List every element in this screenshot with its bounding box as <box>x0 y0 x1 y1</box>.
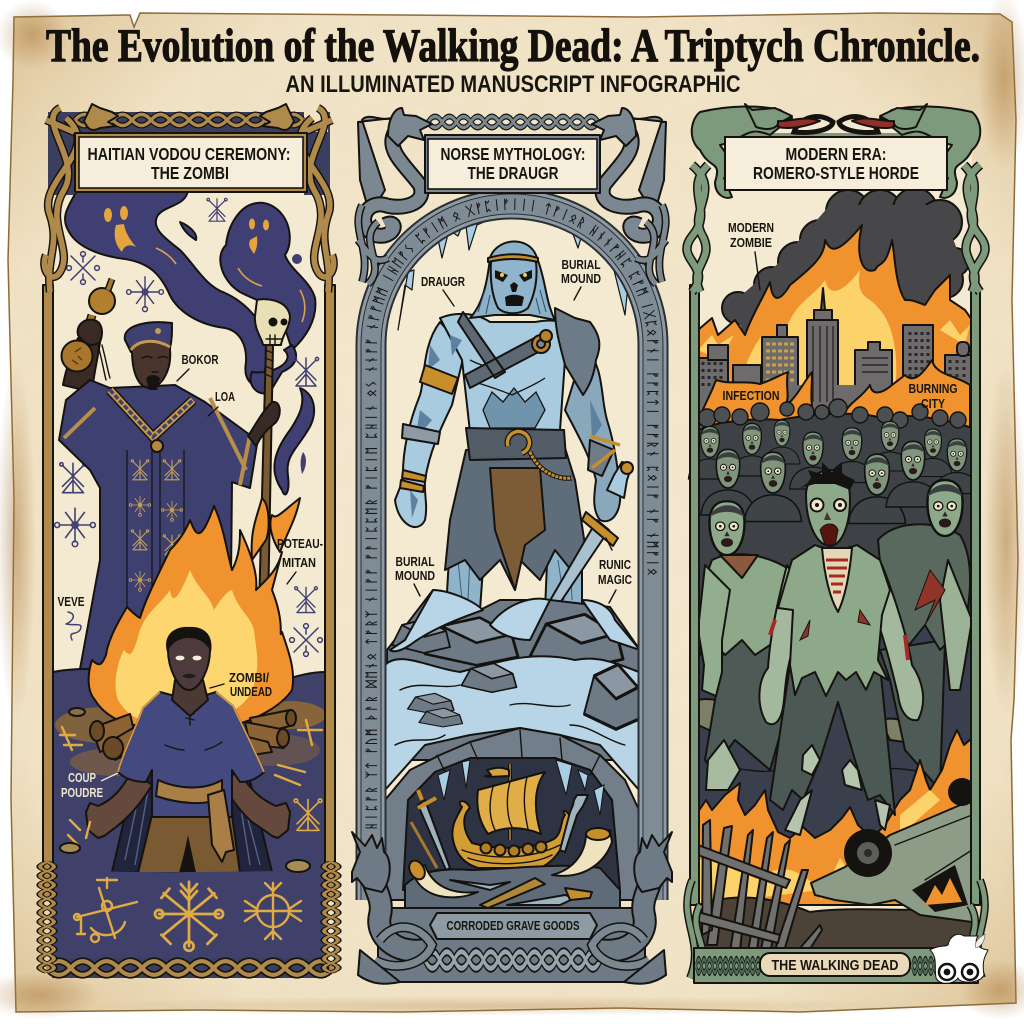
right hand <box>248 402 280 446</box>
burning ground <box>698 897 972 950</box>
zombie: left <box>698 501 790 790</box>
swords and horns <box>406 790 612 908</box>
label: corroded grave goods: CORRODED GRAVE GOODS <box>446 918 580 933</box>
broken fence <box>698 820 808 958</box>
bokor priest <box>59 279 290 680</box>
zombi rising from the grave <box>86 627 290 873</box>
shirt <box>778 545 890 696</box>
sash <box>156 780 222 803</box>
rune inscription: ᚺᛁᛈᚠᚱ ᛉᛏ ᚠᚢᛗ ᚦᚨᚱ ᛞᛖᚾᛟ ᛏᚠᚱᛉ ᚾᛁᚠᚠ ᚠᚨᛁᛈᛈᛖᚱ ᚠᛁᛈᛁᛖ ᛈᚺᛁᚾ ᛟᛊ ᚾᚾᚠᚠ ᚾᚠᚠᛗᛗ ᛁᚺᛖᚠᛊ ᛈᚠᛁᛗ ᛟ ᚷᚠᛈᛁᚠᛁᛁᛁ ᛏᚠᛁᛟᚱ ᚺᚾᚾᚠᚺᛈ ᛈᚠᛗ ᛁᚷᛈᛟᚠᚾᛁ ᚠᚠᛈᛏᛁ ᚠᚠᚱᚾ ᛈᛟᛁᚠ ᚾᚠ ᚾᛗᚠᛁᛟ <box>365 198 659 828</box>
sword <box>527 462 633 640</box>
bottom braid <box>52 958 326 978</box>
left arm <box>395 322 465 527</box>
heading box: THE DRAUGR <box>468 163 559 183</box>
callouts: MITAN <box>282 556 316 570</box>
panel interior <box>697 125 972 975</box>
bonfire <box>89 498 300 725</box>
tattered trousers <box>770 665 895 815</box>
callouts: INFECTION <box>722 389 780 403</box>
burning city <box>698 288 972 445</box>
icicles <box>398 216 632 330</box>
loincloth <box>490 468 545 590</box>
silhouette crowd <box>698 399 966 428</box>
heading box: HAITIAN VODOU CEREMONY: <box>88 144 290 164</box>
skull face <box>491 257 537 313</box>
ornament: upper dragons and knotwork <box>358 108 666 284</box>
callouts: LOA <box>215 390 235 404</box>
earth patches <box>55 701 326 776</box>
callouts: POUDRE <box>61 786 103 800</box>
pants <box>138 815 240 873</box>
callouts: MAGIC <box>598 573 632 587</box>
frame <box>40 104 338 978</box>
gold arm bands <box>420 365 458 394</box>
cave icicles <box>438 760 604 815</box>
horde <box>688 399 980 760</box>
knotted vines <box>687 165 985 292</box>
head <box>800 462 855 546</box>
raised arm <box>63 338 100 392</box>
skirt <box>445 448 585 590</box>
arms <box>86 770 290 838</box>
callouts: BURIAL <box>562 258 601 272</box>
grave pit <box>112 760 272 872</box>
gourd rattle <box>62 279 115 380</box>
draugr <box>395 241 633 640</box>
left dragon <box>358 108 432 284</box>
callouts: BURNING <box>908 382 958 396</box>
belt <box>466 428 566 460</box>
horde backdrop <box>698 414 972 760</box>
legs <box>446 540 582 610</box>
callouts: DRAUGR <box>421 275 465 289</box>
arms <box>759 565 808 724</box>
label: corroded grave goods <box>430 913 597 939</box>
foreground flames <box>698 730 972 905</box>
callouts: BOKOR <box>182 353 218 367</box>
callouts: ZOMBIE <box>730 236 772 250</box>
robe trim <box>64 390 250 670</box>
chest wounds <box>468 360 545 428</box>
vodou sigils <box>55 198 322 656</box>
spirit smoke <box>65 190 315 494</box>
cross strap <box>458 312 548 388</box>
hair <box>470 241 555 320</box>
heading box <box>725 137 947 190</box>
callouts: MODERN <box>728 221 774 235</box>
central knot <box>428 116 598 128</box>
city windows <box>703 326 964 402</box>
neck and head <box>172 680 208 716</box>
burial mound rocks <box>385 590 642 790</box>
zombie: central leader <box>759 462 923 835</box>
callouts <box>395 258 632 603</box>
icon: owl logo <box>930 934 988 983</box>
hand on rattle <box>78 320 102 345</box>
callouts <box>722 221 958 411</box>
callouts: MOUND <box>395 569 435 583</box>
callouts: CITY <box>921 397 946 411</box>
heading box <box>425 135 600 193</box>
debris <box>800 925 822 952</box>
heading box <box>75 133 307 192</box>
undead beasts <box>692 104 820 198</box>
staff with skull <box>255 299 290 610</box>
arch interior <box>385 218 639 900</box>
gold veve symbols <box>60 720 322 951</box>
black smoke <box>722 188 969 345</box>
heading box: NORSE MYTHOLOGY: <box>440 144 586 164</box>
zombie: right <box>878 480 972 790</box>
callouts <box>58 353 323 800</box>
fire behind city <box>698 225 972 490</box>
bottom knots <box>687 880 985 978</box>
top knots <box>794 117 878 133</box>
shoulder armor <box>555 308 599 395</box>
robe <box>59 380 258 680</box>
dragon heads <box>84 104 118 130</box>
side bars <box>43 285 335 900</box>
overturned car <box>811 778 976 922</box>
rubble <box>60 708 310 872</box>
callouts: VEVE <box>58 595 84 609</box>
ground <box>53 669 326 975</box>
longship <box>452 764 570 868</box>
tunic <box>118 692 264 817</box>
panel: modern era <box>687 104 985 983</box>
gold chain <box>530 452 572 478</box>
logs <box>90 710 296 760</box>
arm shading <box>410 335 602 518</box>
right dragon <box>592 108 666 284</box>
heading box: THE ZOMBI <box>151 163 229 183</box>
cave floor <box>405 866 620 912</box>
zombie faces <box>688 420 980 524</box>
heading box: MODERN ERA: <box>786 144 886 164</box>
callouts: RUNIC <box>599 558 631 572</box>
foreground floor <box>698 600 972 840</box>
callouts: POTEAU- <box>277 537 323 551</box>
subtitle: AN ILLUMINATED MANUSCRIPT INFOGRAPHIC <box>286 71 740 98</box>
head and hat <box>125 322 172 390</box>
torso <box>440 314 590 432</box>
callouts: UNDEAD <box>230 685 272 699</box>
label: the walking dead: THE WALKING DEAD <box>772 958 898 974</box>
foreground earth <box>53 871 326 965</box>
heading box: ROMERO-STYLE HORDE <box>753 163 919 183</box>
label: the walking dead <box>760 953 910 976</box>
frame <box>687 104 985 983</box>
burial cave <box>385 728 639 912</box>
right arm <box>565 345 620 521</box>
panel: Norse mythology <box>351 107 673 985</box>
callouts: ZOMBI/ <box>229 671 269 685</box>
exposed ribs <box>822 548 852 612</box>
street flames <box>698 360 970 435</box>
lower dragon ornament <box>352 832 672 984</box>
callouts: BURIAL <box>396 555 435 569</box>
panel interior <box>52 125 326 975</box>
panel: Haitian Vodou ceremony <box>40 104 338 978</box>
arch band <box>371 204 653 900</box>
callouts: MOUND <box>561 272 601 286</box>
pit shadow lines <box>125 790 260 865</box>
callouts: COUP <box>68 771 96 785</box>
inner flames <box>700 790 940 905</box>
